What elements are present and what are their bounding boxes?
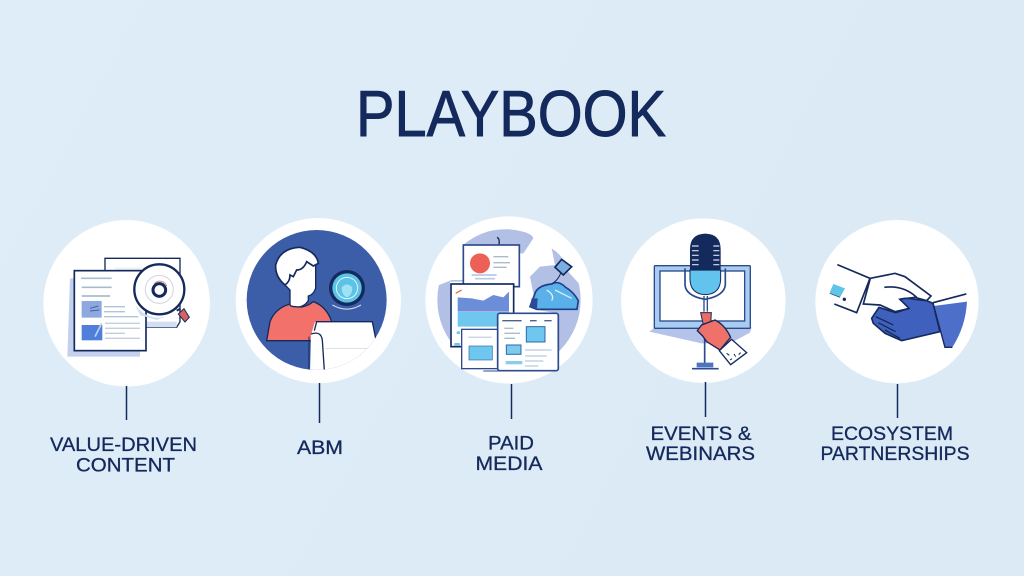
label: PARTNERSHIPS: [820, 443, 970, 465]
label: [50, 434, 197, 476]
connector: [704, 382, 706, 417]
label: WEBINARS: [646, 443, 755, 465]
icon: ad layouts and mountain: [425, 216, 593, 384]
label: EVENTS &: [650, 423, 752, 445]
label: PAID: [488, 432, 534, 454]
connector: [126, 386, 128, 420]
icon: person with target: [236, 218, 401, 383]
label: ECOSYSTEM: [831, 423, 953, 445]
label: [476, 432, 542, 475]
panel: ecosystem partnerships: [815, 220, 979, 465]
connector: [510, 384, 512, 419]
panel: value-driven content: [43, 220, 210, 476]
icon: handshake: [815, 220, 979, 383]
panel: paid media: [425, 216, 593, 475]
connector: [896, 384, 898, 418]
panel: ABM: [236, 218, 401, 459]
icon: documents and magnifier: [43, 220, 210, 387]
title: PLAYBOOK: [356, 77, 666, 150]
label: MEDIA: [476, 453, 542, 475]
panel: events and webinars: [621, 218, 786, 465]
label: [820, 423, 970, 465]
label: CONTENT: [76, 454, 175, 476]
icon: microphone and screen: [621, 218, 786, 383]
label: [646, 423, 755, 465]
label: VALUE-DRIVEN: [50, 434, 197, 456]
connector: [318, 383, 320, 423]
label: ABM: [297, 437, 343, 459]
